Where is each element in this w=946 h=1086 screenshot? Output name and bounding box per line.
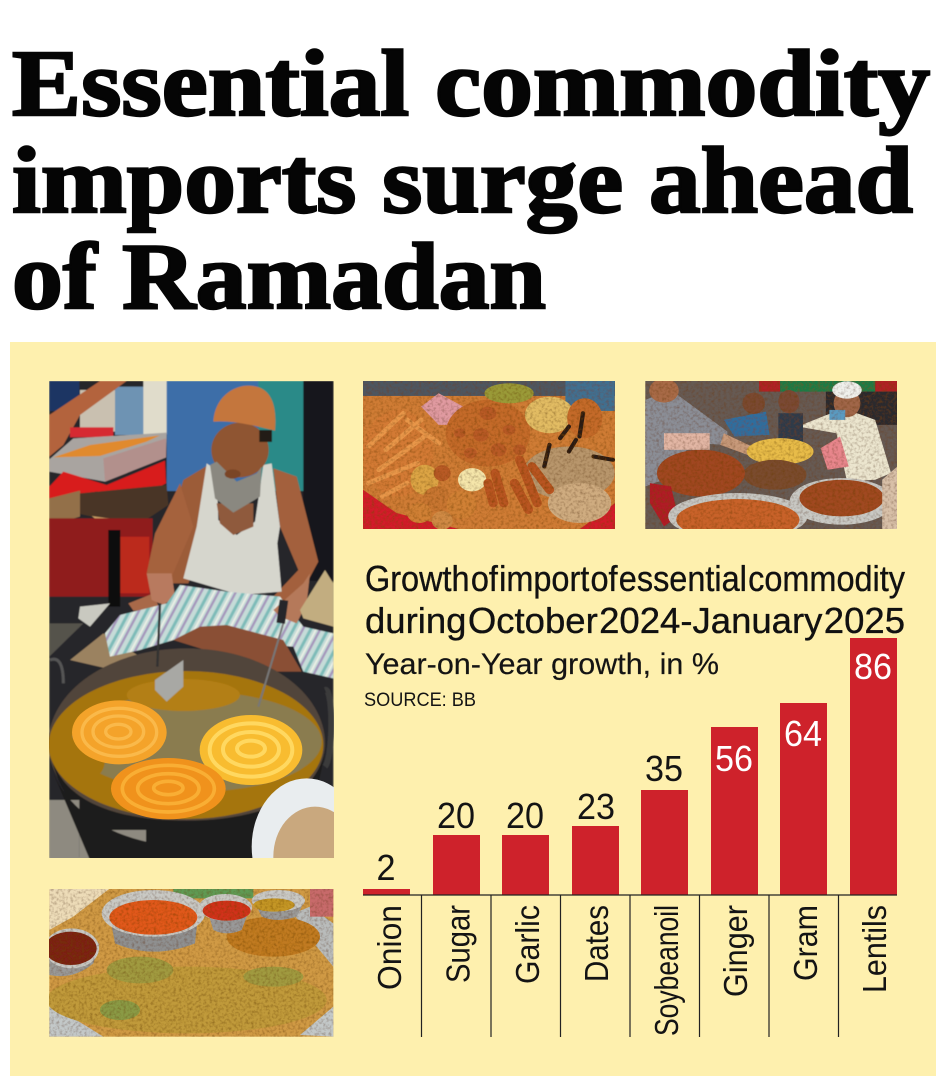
photo: spiced chickpeas [44,888,333,1037]
chart subtitle: Year-on-Year growth, in % [365,648,719,681]
axis and separators [363,895,897,1037]
category labels: Onion [371,905,408,990]
jalebi left [72,700,167,764]
category labels: Ginger [717,905,754,997]
source note: SOURCE: BB [364,690,476,711]
value labels: 56 [715,738,753,779]
white bowl [252,778,334,858]
value labels: 86 [854,646,892,687]
value labels [376,646,892,888]
panel: cream background [10,342,936,1076]
category labels: Lentils [856,905,893,993]
title: Essential commodity [12,32,930,136]
value labels: 23 [577,786,615,827]
category labels: Garlic [509,905,546,984]
category labels: Dates [578,905,615,982]
title [12,32,930,329]
bars [363,638,897,895]
category labels: Sugar [440,905,476,983]
category labels: Soybean oil [648,905,685,1036]
category labels: Gram [787,905,824,981]
chart heading [365,558,905,641]
title: of Ramadan [12,225,546,329]
value labels: 20 [506,795,544,836]
value labels: 20 [437,795,475,836]
jalebi bottom [111,758,226,819]
category labels [371,905,893,1036]
photo: iftar stall vendors [645,379,897,540]
photo: man frying jalebi [49,381,334,858]
value labels: 2 [376,847,396,888]
value labels: 35 [645,748,683,789]
title: imports surge ahead [12,129,913,233]
jalebi right [200,715,302,785]
value labels: 64 [784,713,822,754]
bar chart [363,638,897,1037]
photo: fried snacks [363,381,615,530]
chart heading: during October 2024-January 2025 [365,600,905,641]
